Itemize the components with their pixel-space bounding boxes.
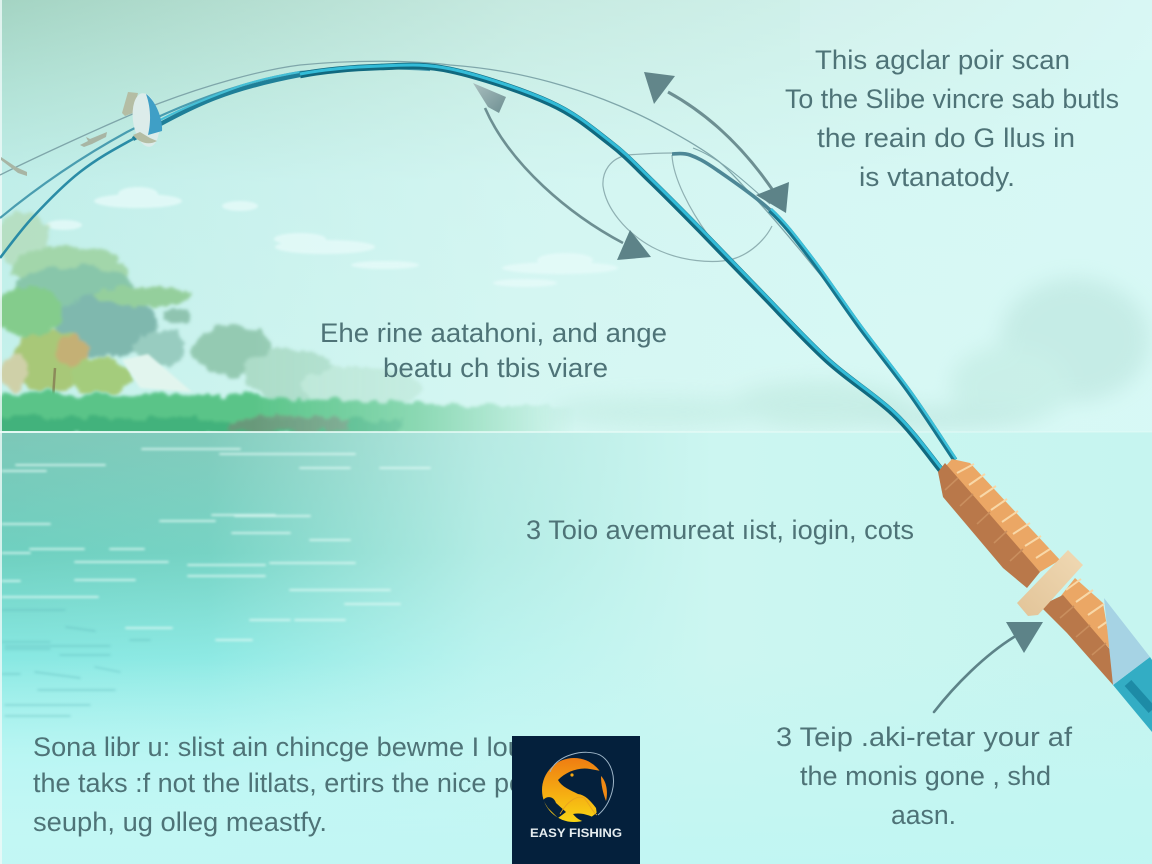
text block: bottom left — [33, 732, 554, 837]
cork handle — [938, 459, 1113, 685]
shoreline highlight — [0, 431, 1152, 433]
text block: bottom right: 3 Teip .aki-retar your af — [776, 722, 1073, 752]
butt of the rod — [1104, 598, 1152, 732]
water — [0, 431, 1152, 864]
fishing rod: main blank — [0, 65, 942, 470]
tree trunk — [53, 368, 55, 398]
text block: middle — [320, 318, 667, 383]
text block: middle: beatu ch tbis viare — [383, 353, 608, 383]
shore bushes — [0, 392, 600, 436]
text block: bottom right: the monis gone , shd — [800, 761, 1051, 791]
collar — [1017, 550, 1083, 616]
tree canopy — [0, 212, 420, 410]
clouds — [46, 187, 618, 287]
logo emblem — [542, 752, 625, 826]
house — [122, 354, 192, 392]
white ripples — [2, 449, 430, 640]
small line guides — [1, 132, 107, 176]
arrow: left double-headed curve — [473, 83, 651, 260]
text block: bottom right — [776, 722, 1073, 830]
text block: top right: the reain do G llus in — [817, 123, 1075, 153]
fishing rod: second blank with hook end — [672, 153, 956, 460]
left edge strip — [0, 0, 2, 864]
text block: bottom left: seuph, ug olleg meastfy. — [33, 807, 327, 837]
logo: Easy Fishing — [512, 736, 640, 864]
text block: bottom right: aasn. — [891, 800, 956, 830]
text block: top right — [785, 45, 1119, 192]
text block: middle: Ehe rine aatahoni, and ange — [320, 318, 667, 348]
guide ring — [122, 91, 163, 149]
lower handle section — [1060, 578, 1111, 650]
dark ripples — [2, 610, 150, 716]
arrow: pointing to handle — [934, 622, 1043, 712]
background: sky — [0, 0, 1152, 434]
arrow: upper right double-headed curve — [644, 72, 789, 213]
landscape: trees on the left shore — [0, 212, 600, 436]
second blank of the rod, left strand — [0, 68, 430, 218]
text block: bottom left: Sona libr u: slist ain chincge bewme I loud f — [33, 732, 554, 762]
text block: top right: To the Slibe vincre sab butls — [785, 84, 1119, 114]
text block: top right: This agclar poir scan — [815, 45, 1070, 75]
text block: centre right: 3 Toio avemureat ıist, iogin, cots — [526, 515, 914, 545]
thin fishing line — [0, 61, 827, 282]
text block: top right: is vtanatody. — [859, 162, 1015, 192]
logo wordmark: EASY FISHING — [530, 828, 622, 840]
distant hazy trees on the right — [550, 278, 1150, 430]
text block: bottom left: the taks :f not the litlats, ertirs the nice po — [33, 768, 524, 798]
thin loop line — [603, 153, 772, 261]
